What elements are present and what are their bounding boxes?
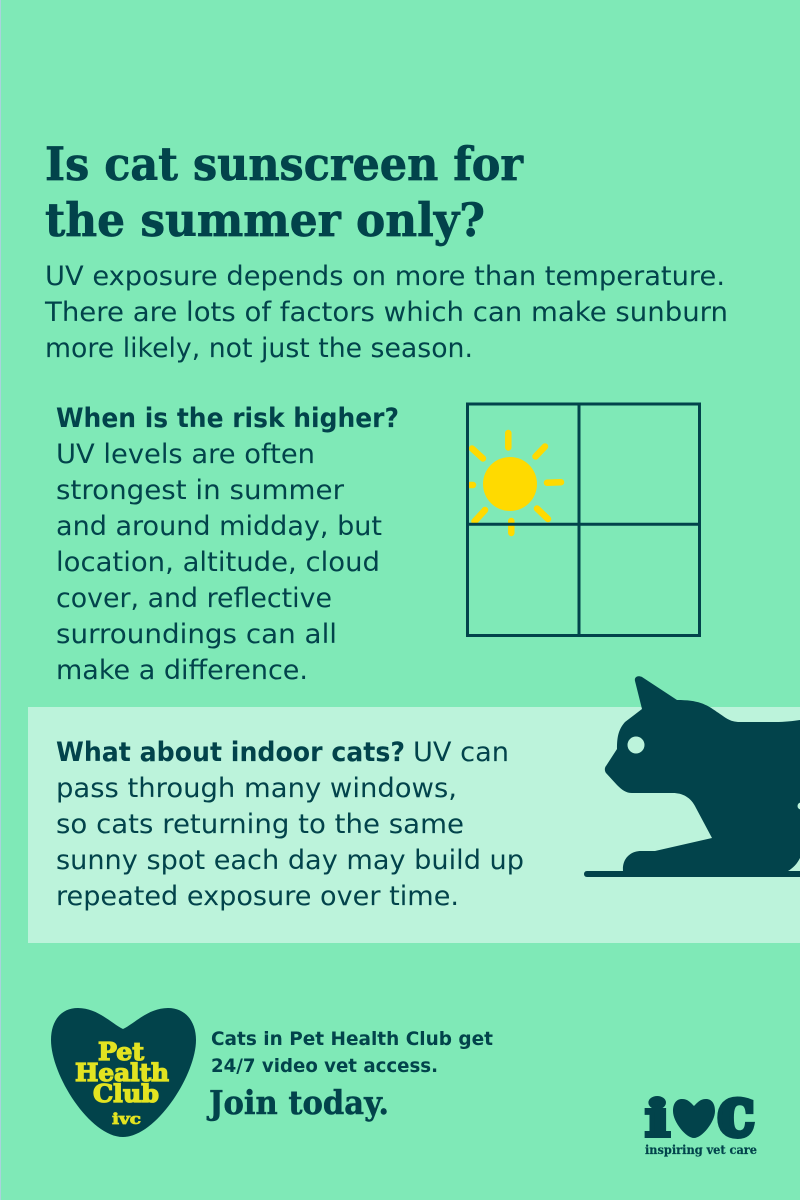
title — [45, 137, 524, 247]
text block: indoor cats: pass through many windows, — [56, 773, 457, 804]
logo: pet health club heart: Health — [75, 1058, 169, 1087]
logo: ivc inspiring vet care: c — [717, 1072, 755, 1152]
text block: when is the risk higher: and around midday, but — [56, 511, 382, 542]
text block: when is the risk higher: UV levels are often — [56, 439, 315, 470]
logo: ivc inspiring vet care — [645, 1072, 757, 1157]
text block: indoor cats: repeated exposure over time. — [56, 881, 459, 912]
text block: when is the risk higher: surroundings can all — [56, 619, 337, 650]
text block: when is the risk higher: cover, and reflective — [56, 583, 332, 614]
text block: indoor cats: UV can — [413, 737, 509, 768]
logo: pet health club heart: Club — [93, 1079, 159, 1108]
text block: when is the risk higher: When is the risk higher? — [56, 403, 399, 434]
panel: indoor cats — [28, 707, 800, 943]
footer call to action — [206, 1028, 493, 1122]
logo: pet health club heart: ivc — [112, 1110, 141, 1128]
text block: indoor cats — [56, 737, 524, 912]
logo: pet health club heart — [51, 1008, 196, 1137]
icon: sun — [470, 433, 561, 533]
icon: window frame — [468, 404, 700, 636]
footer call to action: Cats in Pet Health Club get — [211, 1028, 493, 1050]
icon: sun behind window — [468, 404, 700, 636]
text block: when is the risk higher: location, altitude, cloud — [56, 547, 380, 578]
intro text: UV exposure depends on more than temperature. — [45, 261, 725, 292]
text block: when is the risk higher: make a difference. — [56, 655, 308, 686]
logo: ivc inspiring vet care: i — [645, 1089, 670, 1148]
text block: indoor cats: sunny spot each day may build up — [56, 845, 524, 876]
title: the summer only? — [45, 193, 485, 247]
text block: when is the risk higher: strongest in summer — [56, 475, 345, 506]
text block: indoor cats: so cats returning to the same — [56, 809, 464, 840]
text block: when is the risk higher — [56, 403, 399, 686]
intro text: There are lots of factors which can make sunburn — [44, 297, 728, 328]
icon: cat silhouette — [584, 676, 800, 877]
footer call to action: Join today. — [206, 1083, 389, 1122]
logo: ivc inspiring vet care: inspiring vet care — [645, 1143, 757, 1157]
footer call to action: 24/7 video vet access. — [211, 1055, 438, 1077]
intro text — [44, 261, 728, 364]
title: Is cat sunscreen for — [45, 137, 524, 191]
intro text: more likely, not just the season. — [45, 333, 473, 364]
text block: indoor cats: What about indoor cats? — [56, 737, 405, 768]
logo: pet health club heart: Pet — [98, 1037, 144, 1066]
